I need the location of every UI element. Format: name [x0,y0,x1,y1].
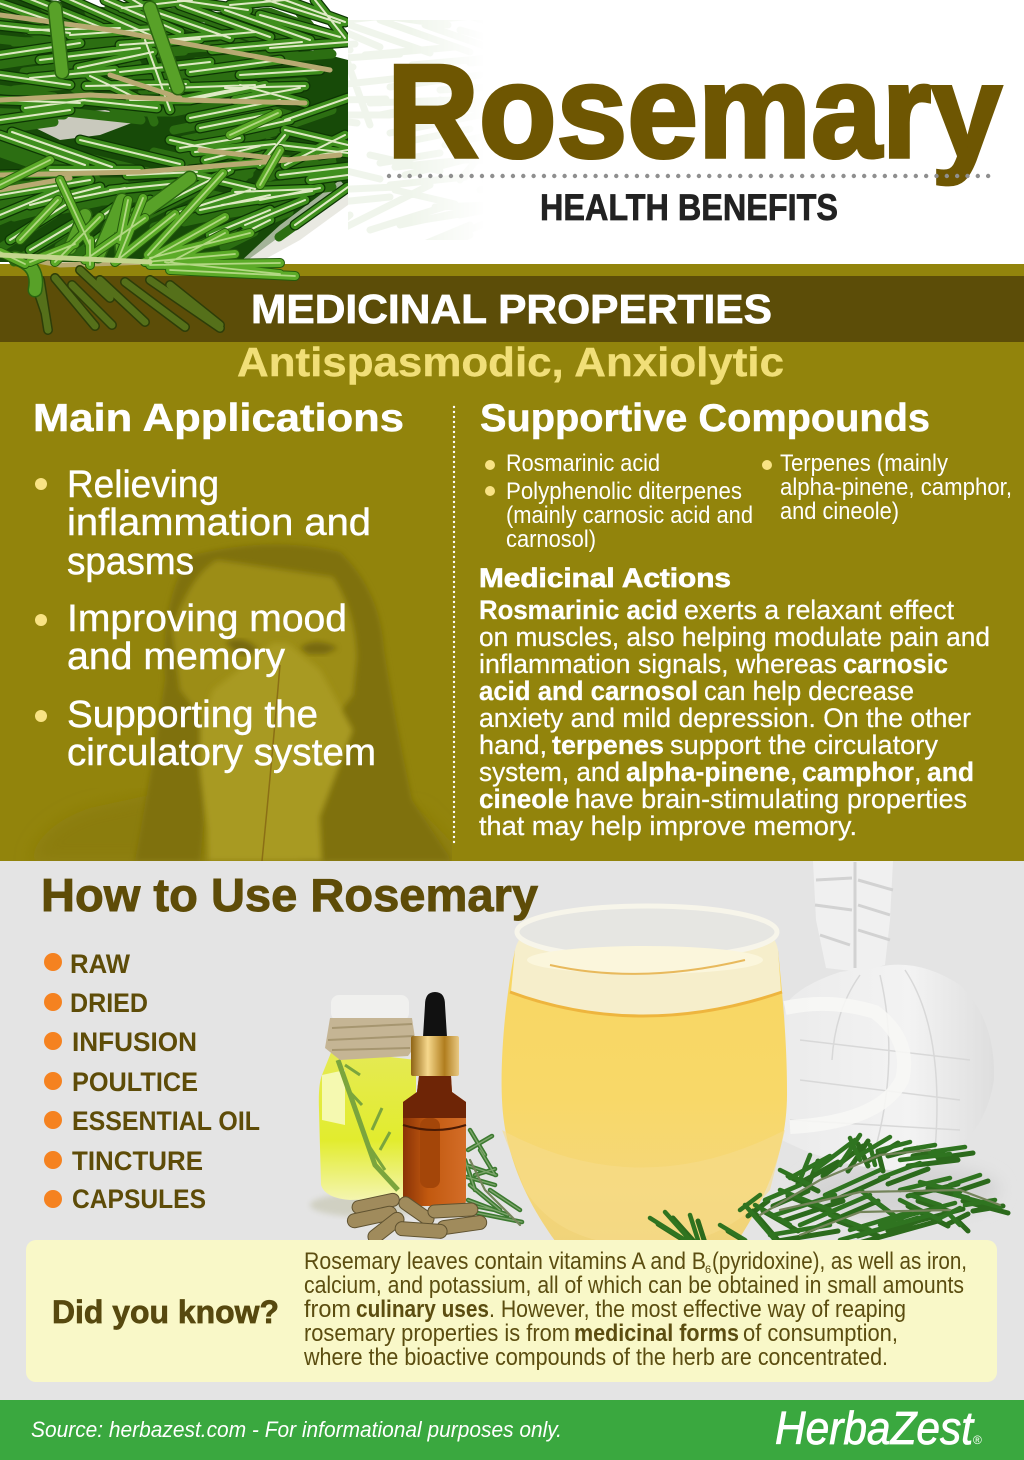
main applications list: Relieving [67,464,219,506]
herbazest logo: HerbaZest [775,1402,975,1454]
did you know text: 6 [705,1264,711,1276]
supportive compounds list [485,450,1012,553]
medicinal actions paragraph: system, and [479,757,620,787]
did you know text: (pyridoxine), as well as iron, [712,1248,967,1275]
main applications list: circulatory system [67,732,376,774]
main applications list: and memory [67,636,285,678]
properties subheading: Antispasmodic, Anxiolytic [237,339,784,385]
did you know text [303,1248,967,1371]
poultice bag [782,861,1000,1218]
main applications list: spasms [67,541,194,583]
medicinal actions paragraph: anxiety and mild depression. On the other [479,703,971,733]
medicinal actions paragraph: support the circulatory [670,730,939,760]
medicinal actions paragraph: , [790,757,798,787]
forms of use list: CAPSULES [72,1184,206,1214]
medicinal actions paragraph: camphor [802,757,914,787]
main applications heading: Main Applications [33,397,404,440]
amber dropper bottle [403,992,466,1206]
did you know label: Did you know? [52,1294,279,1330]
medicinal actions paragraph: inflammation signals, whereas [479,649,837,679]
supportive compounds list: Rosmarinic acid [506,450,660,477]
main applications list: inflammation and [67,502,371,544]
product photo group [310,861,1008,1246]
did you know text: Rosemary leaves contain vitamins A and B [304,1248,706,1275]
supportive compounds list: and cineole) [780,498,899,525]
medicinal actions paragraph: on muscles, also helping modulate pain and [479,622,990,652]
supportive compounds list: (mainly carnosic acid and [506,502,753,529]
medicinal actions paragraph: Rosmarinic acid [479,595,678,625]
did you know text: where the bioactive compounds of the herb are concentrated. [303,1344,888,1371]
herbal tea glass [502,905,787,1245]
medicinal actions paragraph: can help decrease [704,676,914,706]
forms of use list: TINCTURE [72,1146,203,1176]
forms of use list: RAW [70,949,130,979]
how to use panel [0,861,1024,1400]
did you know text: . However, the most effective way of reaping [489,1296,906,1323]
left sprig behind glass [465,1130,522,1222]
did you know text: culinary uses [356,1296,489,1323]
dotted title rule [389,174,992,178]
medicinal actions paragraph: , [914,757,922,787]
glass handle [785,1004,904,1127]
medicinal properties dark band [0,276,1024,342]
forms of use list: ESSENTIAL OIL [72,1106,260,1136]
did you know text: rosemary properties is from [304,1320,570,1347]
source note: Source: herbazest.com - For informational purposes only. [31,1417,562,1442]
how to use heading: How to Use Rosemary [41,869,538,921]
did you know panel [26,1240,997,1382]
main applications list [35,464,376,774]
foreground sprig [470,1135,1008,1246]
medicinal actions heading: Medicinal Actions [479,563,731,593]
medicinal actions paragraph: acid and carnosol [479,676,698,706]
medicinal actions paragraph: alpha-pinene [626,757,790,787]
medicinal properties olive panel [0,264,1024,861]
main applications list: Improving mood [67,598,347,640]
medicinal actions paragraph: have brain-stimulating properties [575,784,967,814]
medicinal actions paragraph: terpenes [552,730,664,760]
forms of use list [44,949,260,1214]
medicinal properties heading: MEDICINAL PROPERTIES [251,286,772,332]
forms of use list: INFUSION [72,1027,197,1057]
medicinal actions paragraph: hand, [479,730,547,760]
rosemary sprig photo [0,0,348,330]
medicinal actions paragraph: that may help improve memory. [479,811,857,841]
supportive compounds heading: Supportive Compounds [480,397,930,440]
supportive compounds list: Terpenes (mainly [780,450,948,477]
medicinal actions paragraph: and [927,757,974,787]
did you know text: of consumption, [743,1320,898,1347]
did you know text: medicinal forms [574,1320,739,1347]
supportive compounds list: Polyphenolic diterpenes [506,478,742,505]
main applications list: Supporting the [67,694,318,736]
supportive compounds list: carnosol) [506,526,596,553]
supportive compounds list: alpha-pinene, camphor, [780,474,1012,501]
forms of use list: POULTICE [72,1067,198,1097]
forms of use list: DRIED [70,988,148,1018]
footer [0,1400,1024,1460]
subtitle: HEALTH BENEFITS [540,187,838,228]
medicinal actions paragraph: cineole [479,784,569,814]
dotted column divider [453,407,455,843]
medicinal actions paragraph: exerts a relaxant effect [684,595,954,625]
title: Rosemary [387,38,1002,186]
oil bottle [310,995,426,1217]
woman photo tint [131,544,452,861]
did you know text: from [304,1296,351,1323]
medicinal actions paragraph: carnosic [843,649,948,679]
medicinal actions paragraph [479,595,990,841]
herbazest logo: ® [973,1433,982,1447]
herbal capsules [346,1192,488,1240]
faded rosemary watermark behind title [348,20,452,240]
